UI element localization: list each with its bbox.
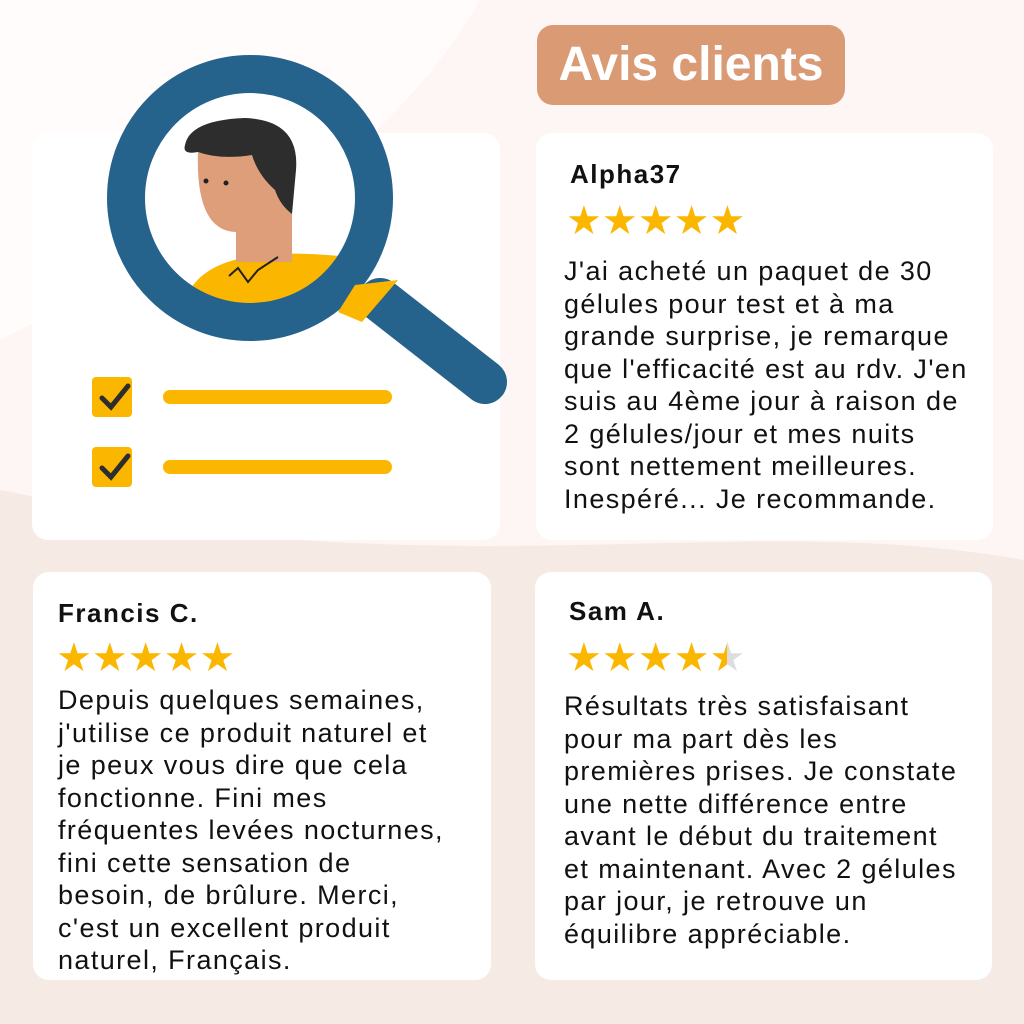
text: avant le début du traitement [564,821,938,851]
panel: Francis C. review [33,572,491,980]
text: et maintenant. Avec 2 gélules [564,854,957,884]
panel: illustration [32,133,500,540]
text: par jour, je retrouve un [564,886,868,916]
text [564,256,968,514]
name: Alpha37 [570,159,682,189]
text: fréquentes levées nocturnes, [58,815,444,845]
text: premières prises. Je constate [564,756,957,786]
panel: Sam A. review [535,572,992,980]
name: Sam A. [569,596,665,626]
text: sont nettement meilleures. [564,451,917,481]
text: Résultats très satisfaisant [564,691,909,721]
title: Avis clients [558,38,824,91]
text: fini cette sensation de [58,848,351,878]
icon: checklist [92,377,392,487]
text: une nette différence entre [564,788,908,818]
text: équilibre appréciable. [564,918,851,948]
stars: ★★★★★ [56,636,235,680]
text: pour ma part dès les [564,724,838,754]
text: je peux vous dire que cela [58,750,408,780]
text: gélules pour test et à ma [564,288,895,318]
stars: ★★★★★ [566,199,745,243]
text: J'ai acheté un paquet de 30 [564,256,933,286]
text: Inespéré... Je recommande. [564,484,937,514]
text: j'utilise ce produit naturel et [58,718,428,748]
stars: ★★★★★ [566,636,745,680]
text: besoin, de brûlure. Merci, [58,880,399,910]
icon: magnifier with person [107,55,507,404]
panel: Alpha37 review [536,133,993,540]
text: suis au 4ème jour à raison de [564,386,959,416]
text: Depuis quelques semaines, [58,685,425,715]
text: que l'efficacité est au rdv. J'en [564,354,968,384]
title [537,25,845,105]
name: Francis C. [58,598,199,628]
text [564,691,957,948]
text: 2 gélules/jour et mes nuits [564,418,915,448]
text: grande surprise, je remarque [564,321,950,351]
text: fonctionne. Fini mes [58,782,328,812]
text: c'est un excellent produit [58,912,391,942]
text [57,685,444,975]
text: naturel, Français. [58,945,292,975]
